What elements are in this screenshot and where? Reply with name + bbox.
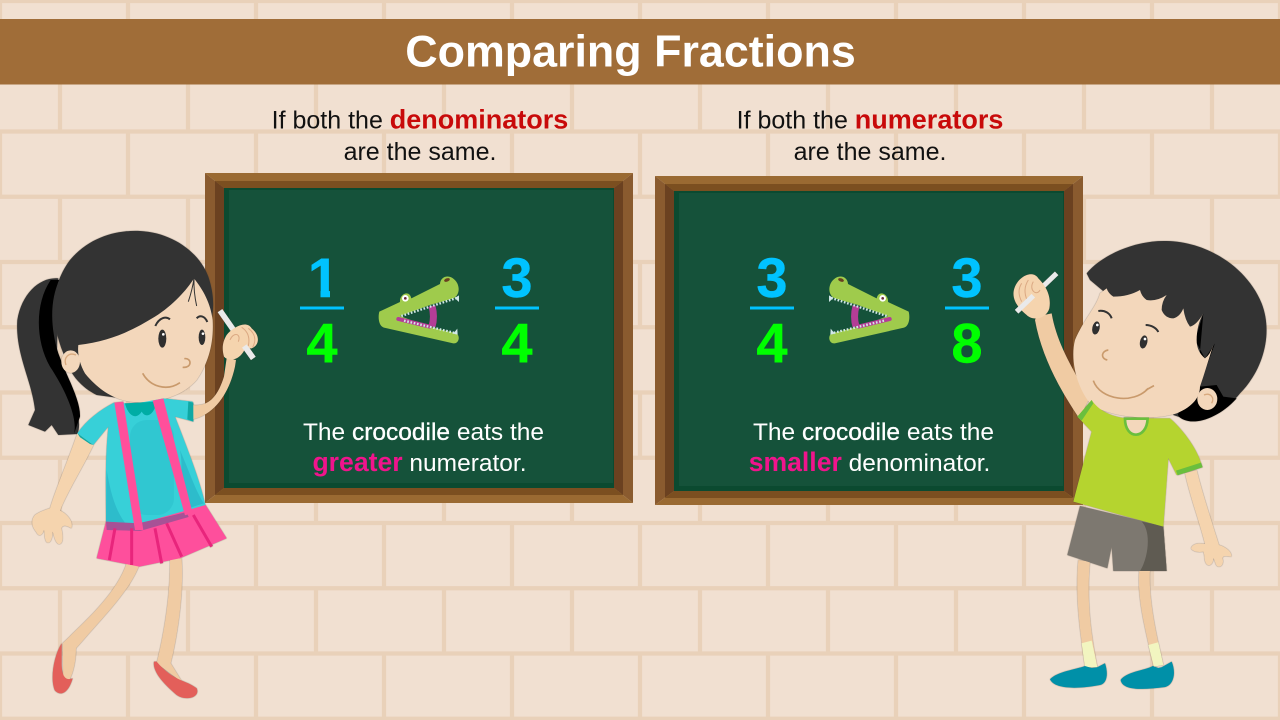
boy legs [1077,560,1163,667]
girl skirt [97,505,227,567]
text: right board rule: smaller denominator. [749,447,990,477]
girl ponytail [17,278,79,435]
girl shoes [53,643,197,698]
panel: left chalkboard [205,173,633,503]
boy hair [1087,241,1267,421]
text: right board rule: The crocodile eats the [753,419,994,446]
boy collar [1125,419,1148,435]
girl hand [223,324,258,360]
boy chalk [1017,273,1057,312]
heading: same numerators: If both the numerators [737,104,1003,134]
fraction: 1/4: 4 [306,312,338,374]
fraction: 3/4 right board [750,246,794,374]
girl straps [114,398,193,530]
text: left board rule: The crocodile eats the [303,419,544,446]
boy eyes [1091,321,1101,335]
boy left arm and hand [1185,470,1231,567]
fraction: 3/8: 3 [951,246,983,309]
boy ear [1197,388,1217,410]
fraction: 3/4 right board: 4 [756,312,788,374]
girl legs [63,558,183,685]
boy hand [1013,274,1050,318]
boy shirt [1073,400,1202,527]
icon: crocodile facing left [379,277,459,343]
fraction: 1/4 [300,246,345,374]
girl nose and smile [143,359,190,387]
girl hair band [39,280,80,434]
illustration: boy with chalk [1013,241,1267,689]
fraction: 3/8: 8 [951,312,983,374]
girl right arm [192,358,236,419]
girl chalk [220,311,253,358]
boy socks [1082,641,1163,667]
heading: same denominators: If both the denominators [272,104,568,134]
fraction: 3/4 left board: 3 [501,246,533,309]
girl dress [77,398,206,525]
text: left board rule: greater numerator. [312,447,527,477]
icon: crocodile facing right [829,277,909,343]
girl ear [61,350,80,373]
fraction: 1/4: 1 [308,246,339,309]
fraction: 3/4 left board: 4 [501,312,533,374]
heading: same denominators: are the same. [344,138,496,166]
girl eyes [158,330,166,348]
illustration: girl with chalk [17,231,258,698]
panel: right chalkboard [655,176,1083,505]
girl left arm and hand [32,433,94,544]
fraction: 3/4 left board [495,246,539,374]
heading: same numerators: are the same. [794,138,946,166]
boy nose and smile [1093,350,1154,398]
girl face [78,278,213,402]
boy shoes [1050,662,1174,689]
fraction: 3/8 [945,246,989,374]
boy shorts [1067,506,1167,571]
girl hair [54,231,213,400]
title banner [0,19,1280,84]
boy raised arm [1035,313,1089,418]
boy face [1073,288,1213,417]
title banner: Comparing Fractions [405,26,856,76]
fraction: 3/4 right board: 3 [756,246,788,309]
